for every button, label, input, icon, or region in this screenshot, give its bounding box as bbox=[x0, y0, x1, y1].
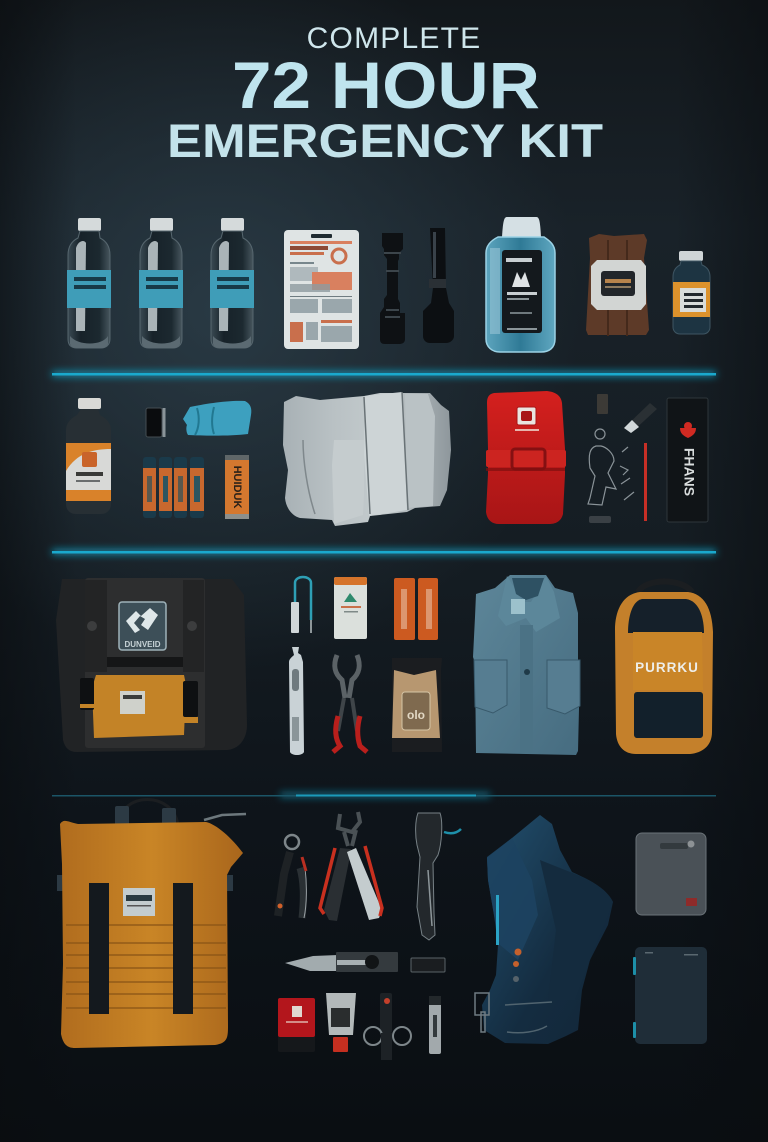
divider: row 1 bbox=[52, 372, 716, 376]
row 4: large orange backpack bbox=[57, 800, 246, 1048]
row 1: sanitizer bottle bbox=[486, 217, 555, 352]
row 3: black backpack: DUNVEID bbox=[124, 640, 161, 649]
row 2: black first aid booklet: FHANS bbox=[681, 448, 697, 496]
row 3: black backpack bbox=[56, 578, 247, 752]
row 1: flashlight small bbox=[380, 233, 405, 344]
water bottle 2 bbox=[139, 218, 183, 348]
title line: complete: COMPLETE bbox=[307, 22, 481, 55]
row 3: orange backpack: PURRKU bbox=[635, 660, 699, 675]
row 4: small pliers bbox=[278, 835, 306, 918]
row 3: red handled pliers bbox=[333, 655, 367, 752]
row 2: black first aid booklet bbox=[667, 398, 708, 522]
row 3: orange tubes bbox=[394, 578, 438, 640]
row 2: small device bbox=[146, 408, 166, 437]
row 3: cream canister bbox=[334, 577, 367, 639]
row 1: brown pouch bbox=[586, 234, 649, 336]
row 1: small orange label bottle bbox=[673, 251, 710, 334]
row 3: white multi-tool bbox=[289, 647, 304, 755]
title line: 72 hour: 72 HOUR bbox=[232, 48, 540, 122]
row 3: food bar bbox=[392, 658, 442, 752]
title bbox=[167, 22, 603, 167]
row 2: batteries set bbox=[143, 457, 204, 518]
row 4: scissors bbox=[364, 993, 411, 1060]
row 2: red first aid bag bbox=[486, 391, 566, 524]
row 2: blue towel bbox=[183, 401, 251, 436]
row 1: instruction card bbox=[284, 230, 359, 349]
water bottle 1 bbox=[67, 218, 111, 348]
row 4: spork tool bbox=[416, 813, 461, 940]
row 1: water bottles bbox=[67, 218, 254, 348]
row 4: folding knife bbox=[285, 952, 445, 972]
row 3: blue shirt bbox=[473, 575, 580, 755]
row 4: dark battery pack bbox=[633, 947, 707, 1044]
row 1: flashlight large bbox=[423, 228, 454, 343]
row 2: dark bottle bbox=[66, 398, 111, 514]
row 4: grey pouch bbox=[636, 833, 706, 915]
row 2: large battery bbox=[225, 455, 249, 519]
row 3: orange backpack bbox=[615, 582, 713, 754]
row 2: large battery: HUIDUK bbox=[231, 466, 243, 508]
title line: emergency kit: EMERGENCY KIT bbox=[167, 114, 603, 167]
row 2: folded white blanket bbox=[283, 392, 451, 526]
row 4: red pack bbox=[278, 998, 315, 1052]
water bottle 3 bbox=[210, 218, 254, 348]
row 3: blue cable tool bbox=[291, 577, 312, 633]
row 4: ointment tube bbox=[326, 993, 356, 1052]
row 4: denim jacket bbox=[475, 815, 613, 1044]
row 2: small tools bbox=[588, 394, 657, 523]
divider: row 2 bbox=[52, 550, 716, 554]
divider: row 3 bbox=[52, 793, 716, 797]
row 3: food bar: olo bbox=[407, 708, 425, 722]
row 4: large pliers bbox=[320, 812, 382, 921]
row 4: utility blade bbox=[429, 996, 441, 1054]
